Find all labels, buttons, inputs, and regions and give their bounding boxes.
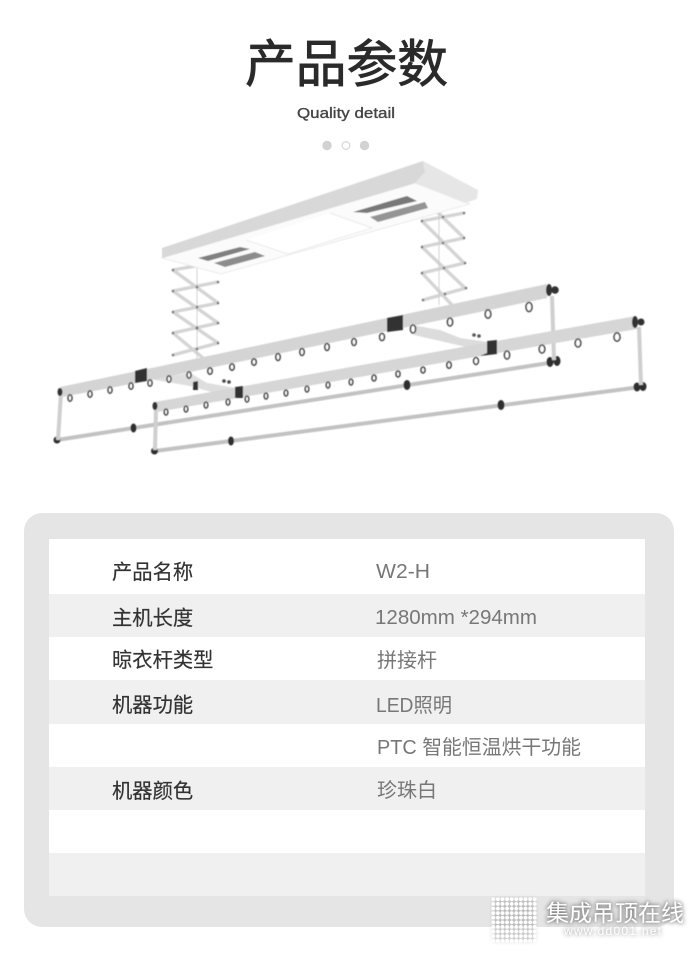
row labels: 机器颜色 (112, 780, 193, 803)
watermark icon (491, 897, 537, 943)
pagination dots (322, 141, 369, 150)
ceiling unit (162, 161, 478, 274)
right scissor lift (419, 190, 467, 305)
title: 产品参数 (245, 36, 448, 93)
row values: 珍珠白 (377, 779, 437, 802)
hanger rails (60, 284, 637, 412)
row labels: 晾衣杆类型 (112, 649, 213, 672)
row labels: 机器功能 (112, 694, 193, 717)
table rows (49, 539, 645, 896)
connector arms (150, 325, 488, 398)
row values: LED照明 (376, 695, 452, 717)
watermark text: www.dd001.net (563, 924, 662, 938)
product illustration: drying rack (54, 161, 646, 454)
watermark logo (491, 897, 684, 943)
vertical posts (58, 296, 641, 450)
watermark text: 集成吊顶在线 (546, 900, 684, 926)
row values: 拼接杆 (377, 649, 437, 672)
black brackets and end caps (58, 284, 644, 410)
row values: PTC 智能恒温烘干功能 (377, 736, 581, 759)
row labels: 产品名称 (112, 561, 193, 584)
row values (375, 561, 581, 802)
watermark text: www.dd001.net (563, 924, 662, 938)
lower tubes (54, 356, 646, 454)
hanger hooks (68, 302, 620, 415)
subtitle: Quality detail (297, 105, 395, 122)
watermark text (546, 900, 684, 938)
row values: 1280mm *294mm (375, 607, 537, 629)
panel: specification table (24, 513, 674, 927)
watermark text: 集成吊顶在线 (546, 900, 684, 926)
row values: W2-H (376, 561, 430, 583)
row labels (112, 561, 213, 803)
left scissor lift (172, 262, 219, 362)
row labels: 主机长度 (112, 607, 193, 630)
